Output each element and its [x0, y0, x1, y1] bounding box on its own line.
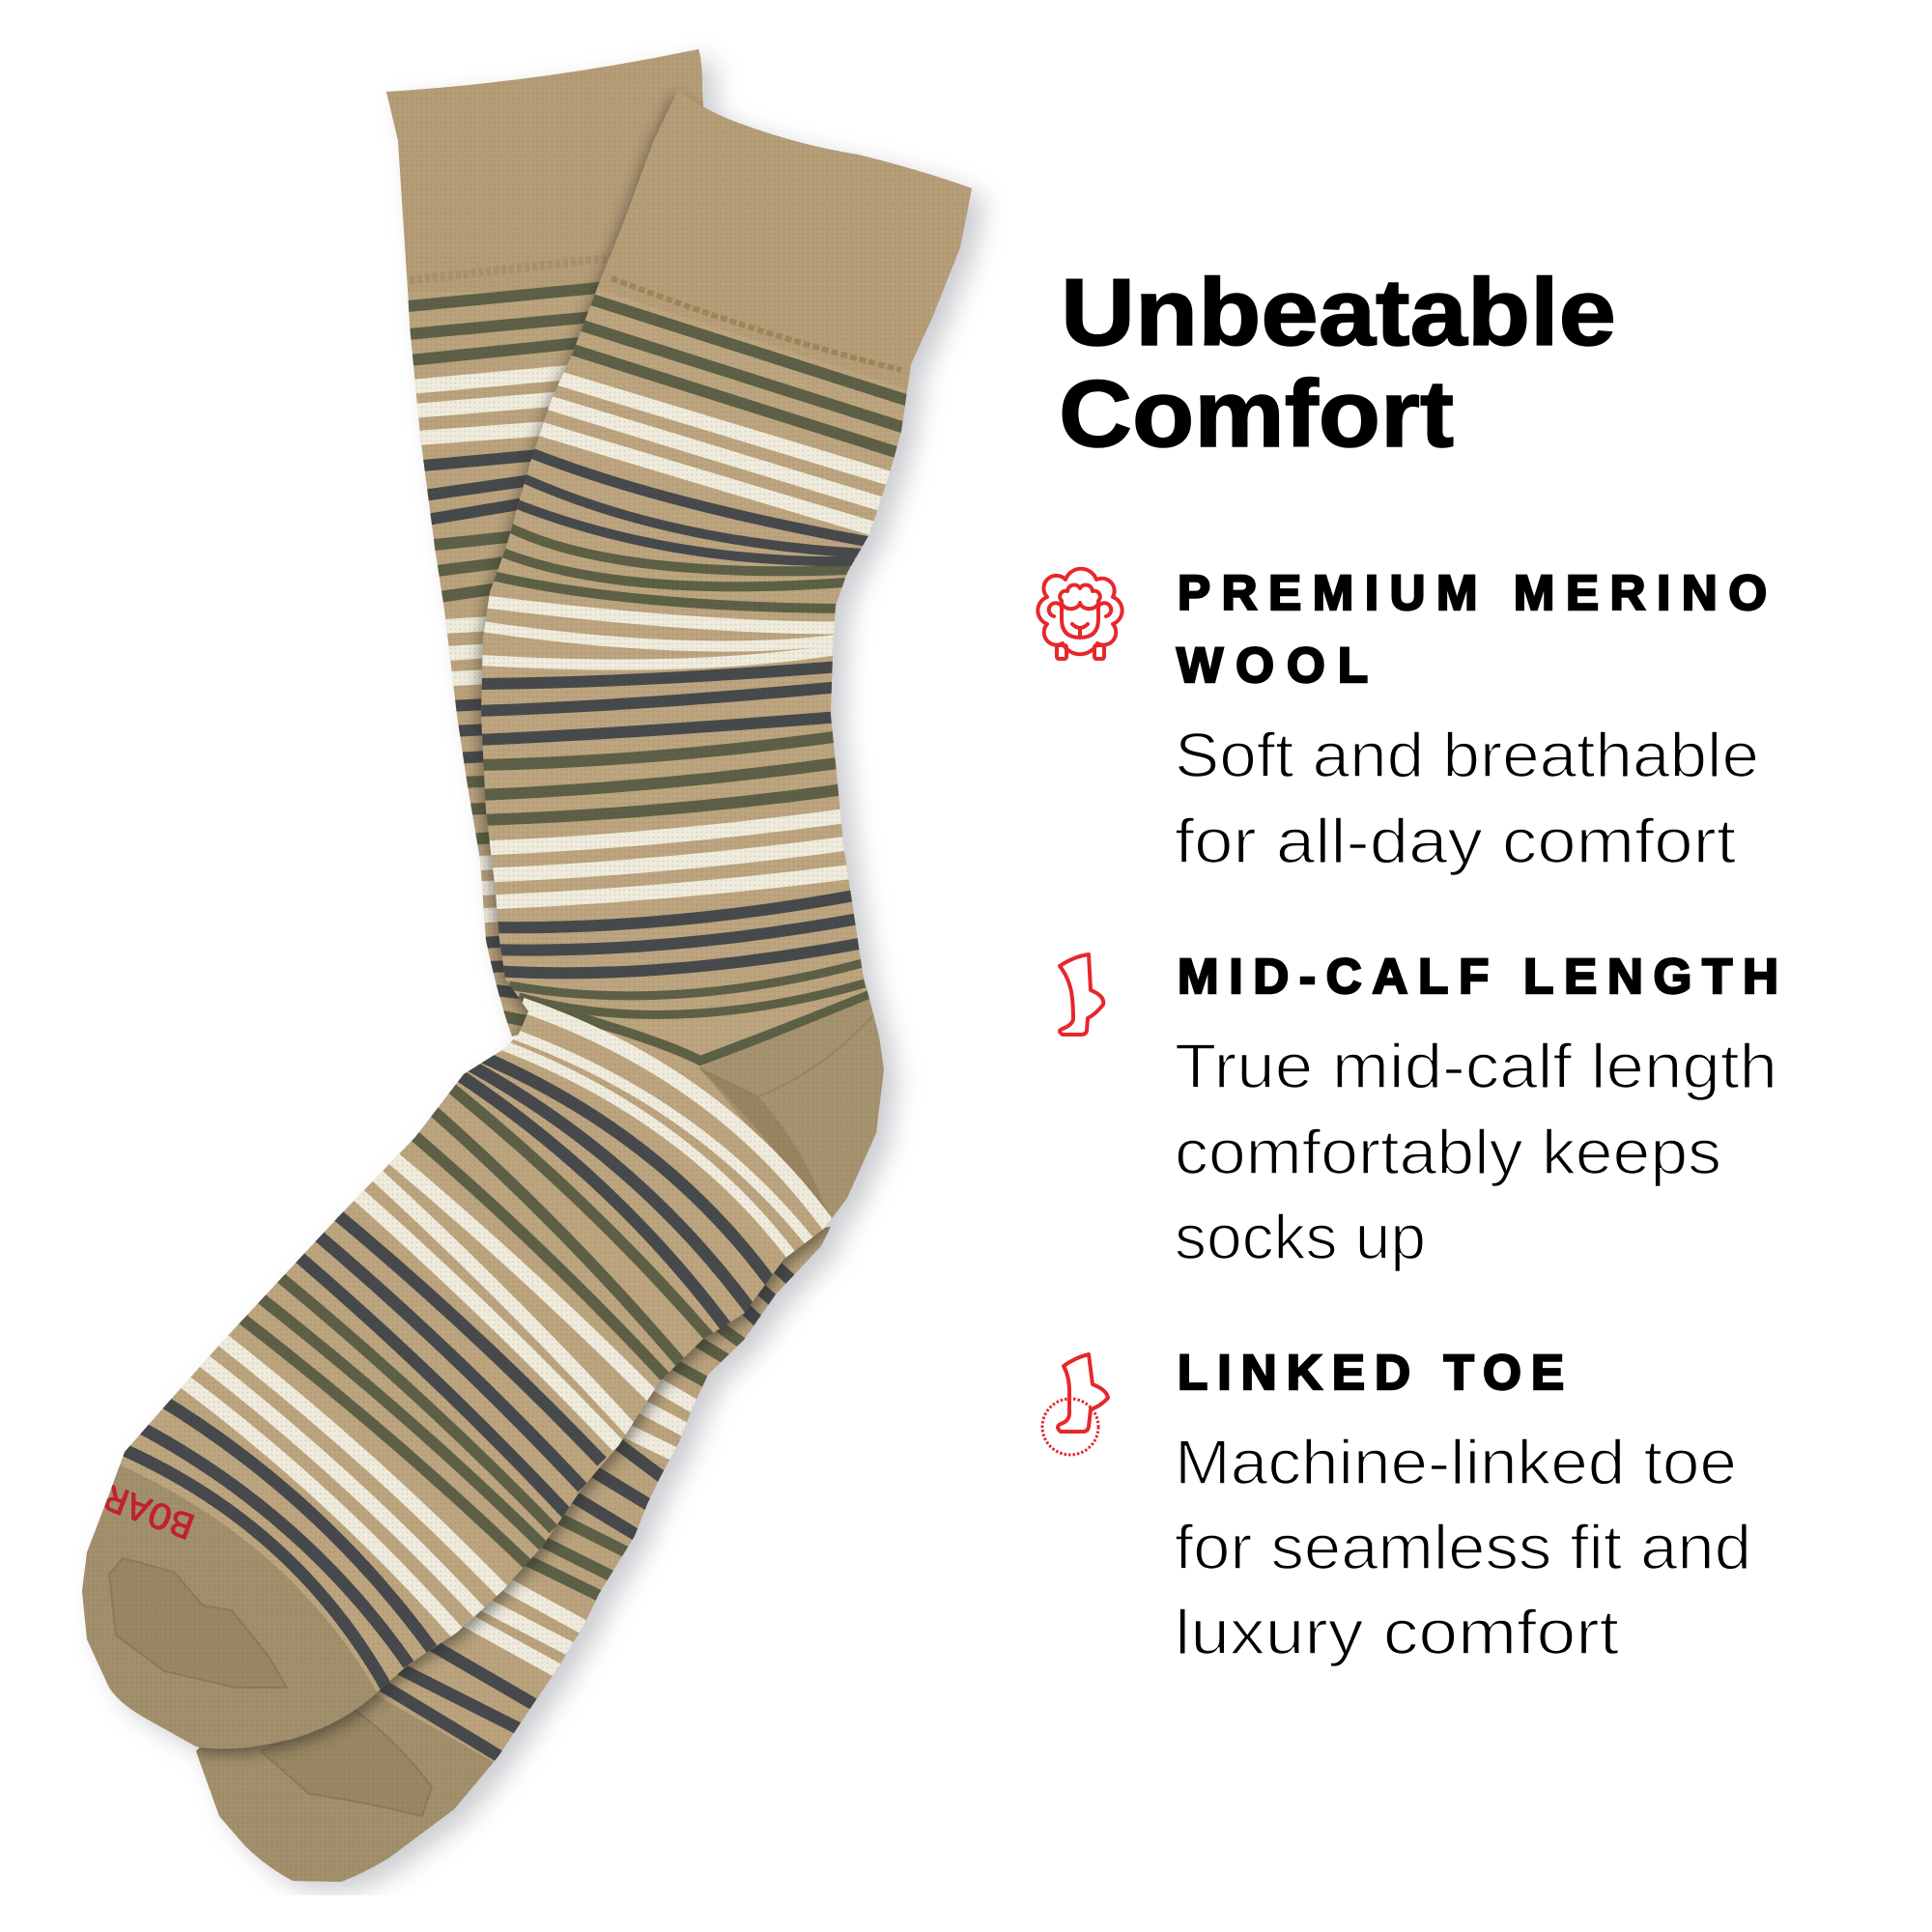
- back sock foot: [196, 1227, 831, 1882]
- front sock cuff: [597, 106, 972, 390]
- feature: mid-calf length: [1060, 949, 1778, 1272]
- description: mid-calf length: True mid-calf length: [1175, 1031, 1777, 1101]
- front foot charcoal stripes: [111, 1055, 780, 1688]
- sock drop shadow: [96, 59, 985, 1891]
- icon: sheep: [1037, 569, 1122, 659]
- heading: mid-calf length: MID-CALF LENGTH: [1178, 949, 1778, 1004]
- description: linked toe: for seamless fit and: [1175, 1512, 1751, 1582]
- heading: premium merino wool: [1177, 565, 1767, 693]
- front foot olive stripes: [232, 1085, 712, 1565]
- description: linked toe: [1175, 1427, 1751, 1667]
- description: linked toe: Machine-linked toe: [1175, 1427, 1737, 1497]
- front leg olive stripes: [478, 296, 918, 1061]
- description: mid-calf length: [1175, 1031, 1777, 1272]
- back toe pocket: [261, 1707, 432, 1816]
- knitted logo on toe: BOAR: [99, 1472, 202, 1546]
- front leg charcoal stripes: [473, 451, 869, 973]
- icon: sock toe with dotted circle: [1042, 1354, 1108, 1455]
- description: linked toe: luxury comfort: [1175, 1597, 1619, 1667]
- front toe pocket: [109, 1558, 287, 1688]
- description: premium merino wool: Soft and breathable: [1175, 720, 1759, 790]
- description: premium merino wool: for all-day comfort: [1175, 806, 1736, 876]
- back sock leg: [386, 49, 703, 1037]
- description: mid-calf length: socks up: [1175, 1202, 1426, 1272]
- description: premium merino wool: [1175, 720, 1759, 876]
- description: mid-calf length: comfortably keeps: [1175, 1117, 1721, 1187]
- feature: premium merino wool: [1037, 565, 1767, 876]
- heading: premium merino wool: WOOL: [1177, 638, 1368, 693]
- front leg cream stripes: [473, 376, 898, 902]
- title: [1059, 259, 1616, 467]
- heading: premium merino wool: PREMIUM MERINO: [1178, 565, 1767, 620]
- title: Comfort: [1059, 360, 1454, 467]
- feature: linked toe: [1042, 1345, 1751, 1667]
- heel patch: [698, 999, 884, 1227]
- pair of striped socks photo: [48, 39, 1005, 1922]
- icon: mid-calf sock: [1060, 954, 1103, 1035]
- front foot cream stripes: [174, 1005, 831, 1633]
- title: Unbeatable: [1061, 259, 1616, 365]
- heading: linked toe: LINKED TOE: [1178, 1345, 1564, 1400]
- front sock: [82, 91, 972, 1748]
- front toe: [82, 1464, 377, 1748]
